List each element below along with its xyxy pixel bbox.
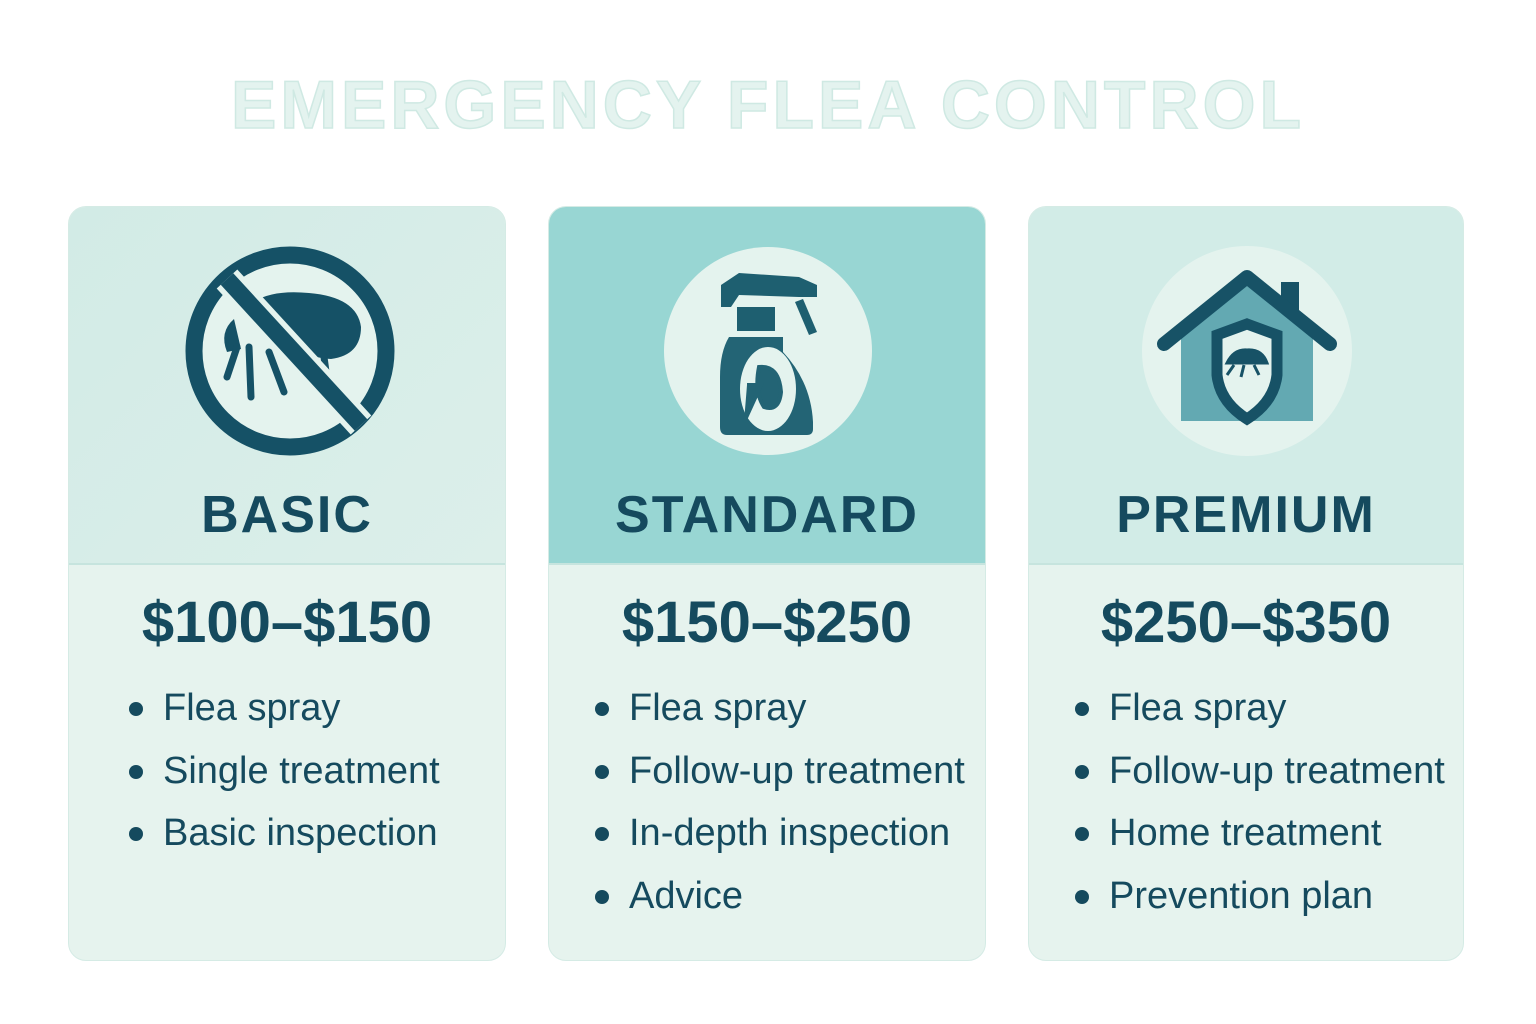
list: standard: In-depth inspection	[629, 812, 950, 854]
panel: premium	[1028, 206, 1464, 961]
list: standard: Flea spray	[629, 687, 806, 729]
price: premium: $250–$350	[1101, 590, 1391, 655]
icon: no flea	[186, 246, 394, 456]
list: basic: Single treatment	[163, 750, 440, 792]
title: EMERGENCY FLEA CONTROL	[231, 67, 1305, 143]
list: standard: Advice	[629, 874, 743, 916]
panel: standard	[548, 206, 986, 961]
list: standard: Follow-up treatment	[629, 750, 965, 792]
name: premium: PREMIUM	[1116, 486, 1376, 544]
list: basic	[129, 687, 440, 854]
list: premium: Home treatment	[1109, 812, 1381, 854]
list: premium: Follow-up treatment	[1109, 750, 1445, 792]
price: basic: $100–$150	[142, 590, 432, 655]
header: premium	[1029, 207, 1463, 565]
list: premium: Prevention plan	[1109, 874, 1373, 916]
icon: spray bottle	[664, 247, 872, 455]
list: basic: Basic inspection	[163, 812, 438, 854]
list: premium	[1075, 687, 1445, 916]
price: standard: $150–$250	[622, 590, 912, 655]
list: standard	[595, 687, 965, 916]
name: standard: STANDARD	[615, 486, 919, 544]
list: premium: Flea spray	[1109, 687, 1286, 729]
icon: house shield	[1142, 246, 1352, 456]
header: standard	[549, 207, 985, 565]
panel: basic	[68, 206, 506, 961]
list: basic: Flea spray	[163, 687, 340, 729]
name: basic: BASIC	[201, 486, 373, 544]
header: basic	[69, 207, 505, 565]
